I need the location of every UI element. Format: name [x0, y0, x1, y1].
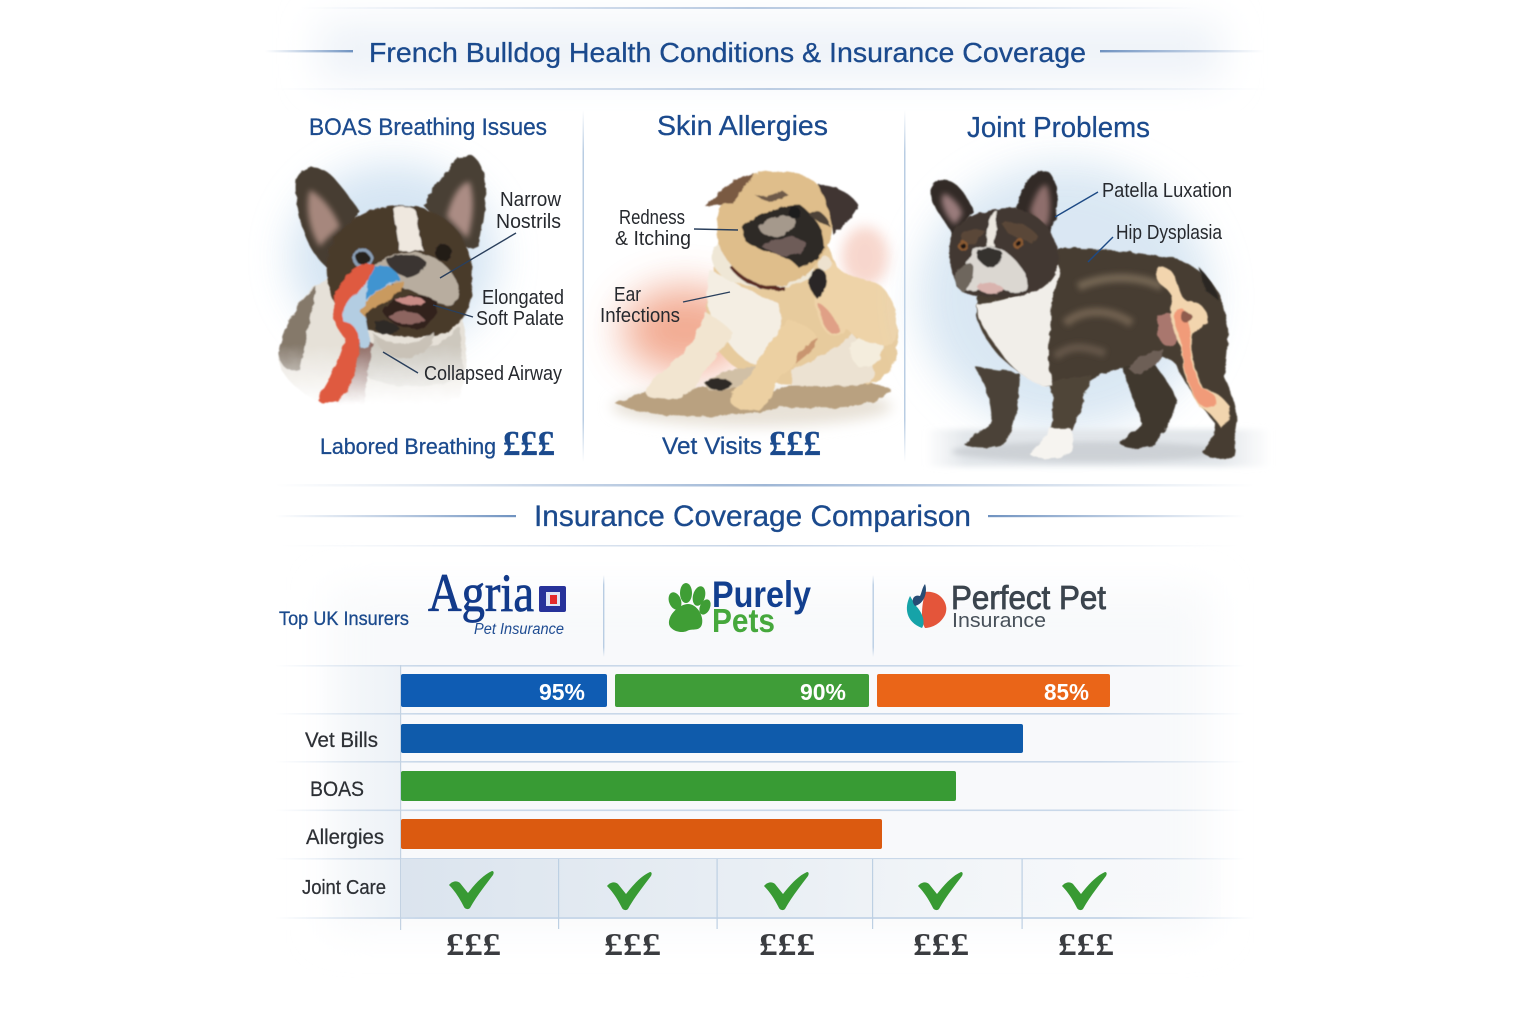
- coverage chart: [275, 665, 1255, 962]
- labels: BOAS anatomy: Narrow: [500, 189, 562, 211]
- labels: BOAS anatomy: Elongated: [482, 287, 564, 309]
- illustration: standing bulldog with hip: [918, 163, 1272, 467]
- row: joint care: [302, 859, 1221, 929]
- heading: BOAS: BOAS Breathing Issues: [309, 114, 547, 141]
- labels: BOAS anatomy: Collapsed Airway: [424, 363, 562, 385]
- cost indicators: £££: [1058, 926, 1114, 962]
- logo: Agria: Pet Insurance: [474, 621, 564, 638]
- check marks: [449, 871, 1107, 910]
- bar: 95%: 95%: [539, 679, 585, 705]
- logo: Purely Pets: Purely: [712, 574, 811, 615]
- labels: skin allergies: Infections: [600, 305, 680, 327]
- labels: skin allergies: [600, 207, 691, 327]
- logo: Perfect Pet Insurance: [907, 579, 1106, 632]
- cost indicators: £££: [759, 926, 815, 962]
- insurer logos row: [279, 563, 1106, 657]
- labels: joint problems: Hip Dysplasia: [1116, 222, 1223, 244]
- leader: hip dysplasia: [1088, 237, 1113, 262]
- logo: Purely Pets: [666, 574, 811, 639]
- leader: redness: [694, 229, 738, 230]
- caption: vet visits cost: £££: [769, 424, 821, 463]
- labels: skin allergies: Ear: [614, 284, 641, 306]
- row: BOAS: BOAS: [310, 778, 364, 801]
- labels: BOAS anatomy: Nostrils: [496, 211, 561, 233]
- labels: BOAS anatomy: [424, 189, 564, 385]
- row: joint care: Joint Care: [302, 877, 386, 899]
- airway overlay: [317, 264, 379, 403]
- heading: skin allergies: Skin Allergies: [657, 110, 828, 141]
- row: allergies: [306, 819, 882, 849]
- caption: vet visits cost: Vet Visits: [662, 433, 762, 460]
- bar: 95%: [401, 674, 607, 707]
- row: vet bills: [305, 724, 1023, 753]
- illustration: scratching bulldog: [612, 171, 898, 427]
- panel: joint problems: [918, 112, 1272, 467]
- caption: labored breathing cost: [320, 424, 555, 463]
- leader: soft palate: [433, 305, 473, 317]
- soft background wash: [320, 24, 1220, 930]
- hip bone overlay: [1155, 268, 1230, 428]
- label: top UK insurers: Top UK Insurers: [279, 609, 409, 630]
- cost indicators: £££: [604, 926, 661, 962]
- labels: skin allergies: Redness: [619, 207, 685, 229]
- caption: vet visits cost: [662, 424, 821, 463]
- logo: Perfect Pet Insurance: Perfect Pet: [951, 579, 1106, 616]
- cost indicators: £££: [913, 926, 969, 962]
- divider: logos: [872, 575, 874, 657]
- labels: BOAS anatomy: Soft Palate: [476, 308, 564, 330]
- bar: 90%: [615, 674, 869, 707]
- divider: panels 1-2: [582, 110, 584, 462]
- row: vet bills: Vet Bills: [305, 729, 378, 752]
- panel: BOAS breathing issues: [278, 114, 564, 463]
- cost indicators: £££: [446, 926, 501, 962]
- logo: Purely Pets: Pets: [712, 602, 775, 639]
- panel: skin allergies: [600, 110, 898, 463]
- percentage bars: [401, 674, 1110, 707]
- logo: Agria: Agria: [428, 563, 534, 623]
- cost indicators: [446, 926, 1114, 962]
- leader: collapsed airway: [383, 352, 418, 373]
- bar: 85%: [877, 674, 1110, 707]
- row: BOAS: [310, 771, 956, 801]
- caption: labored breathing cost: Labored Breathing: [320, 434, 496, 459]
- labels: joint problems: Patella Luxation: [1102, 180, 1232, 202]
- caption: labored breathing cost: £££: [503, 424, 555, 463]
- illustration: bulldog head with airway: [278, 155, 497, 412]
- labels: skin allergies: & Itching: [615, 228, 691, 250]
- title: French Bulldog Health Conditions & Insurance Coverage: [369, 37, 1086, 68]
- chart grid lines: [275, 665, 1255, 930]
- section title: Insurance Coverage Comparison: [534, 500, 971, 533]
- heading: joint problems: Joint Problems: [967, 112, 1150, 144]
- divider: panels 2-3: [904, 110, 906, 462]
- logo: Perfect Pet Insurance: Insurance: [952, 610, 1046, 632]
- leader: patella luxation: [1055, 192, 1098, 217]
- leader: ear infections: [683, 292, 730, 302]
- divider: logos: [603, 575, 604, 657]
- bar: 85%: 85%: [1044, 679, 1089, 705]
- labels: joint problems: [1102, 180, 1232, 244]
- row: allergies: Allergies: [306, 826, 384, 849]
- bar: 90%: 90%: [800, 679, 846, 705]
- leader: narrow nostrils: [440, 233, 516, 278]
